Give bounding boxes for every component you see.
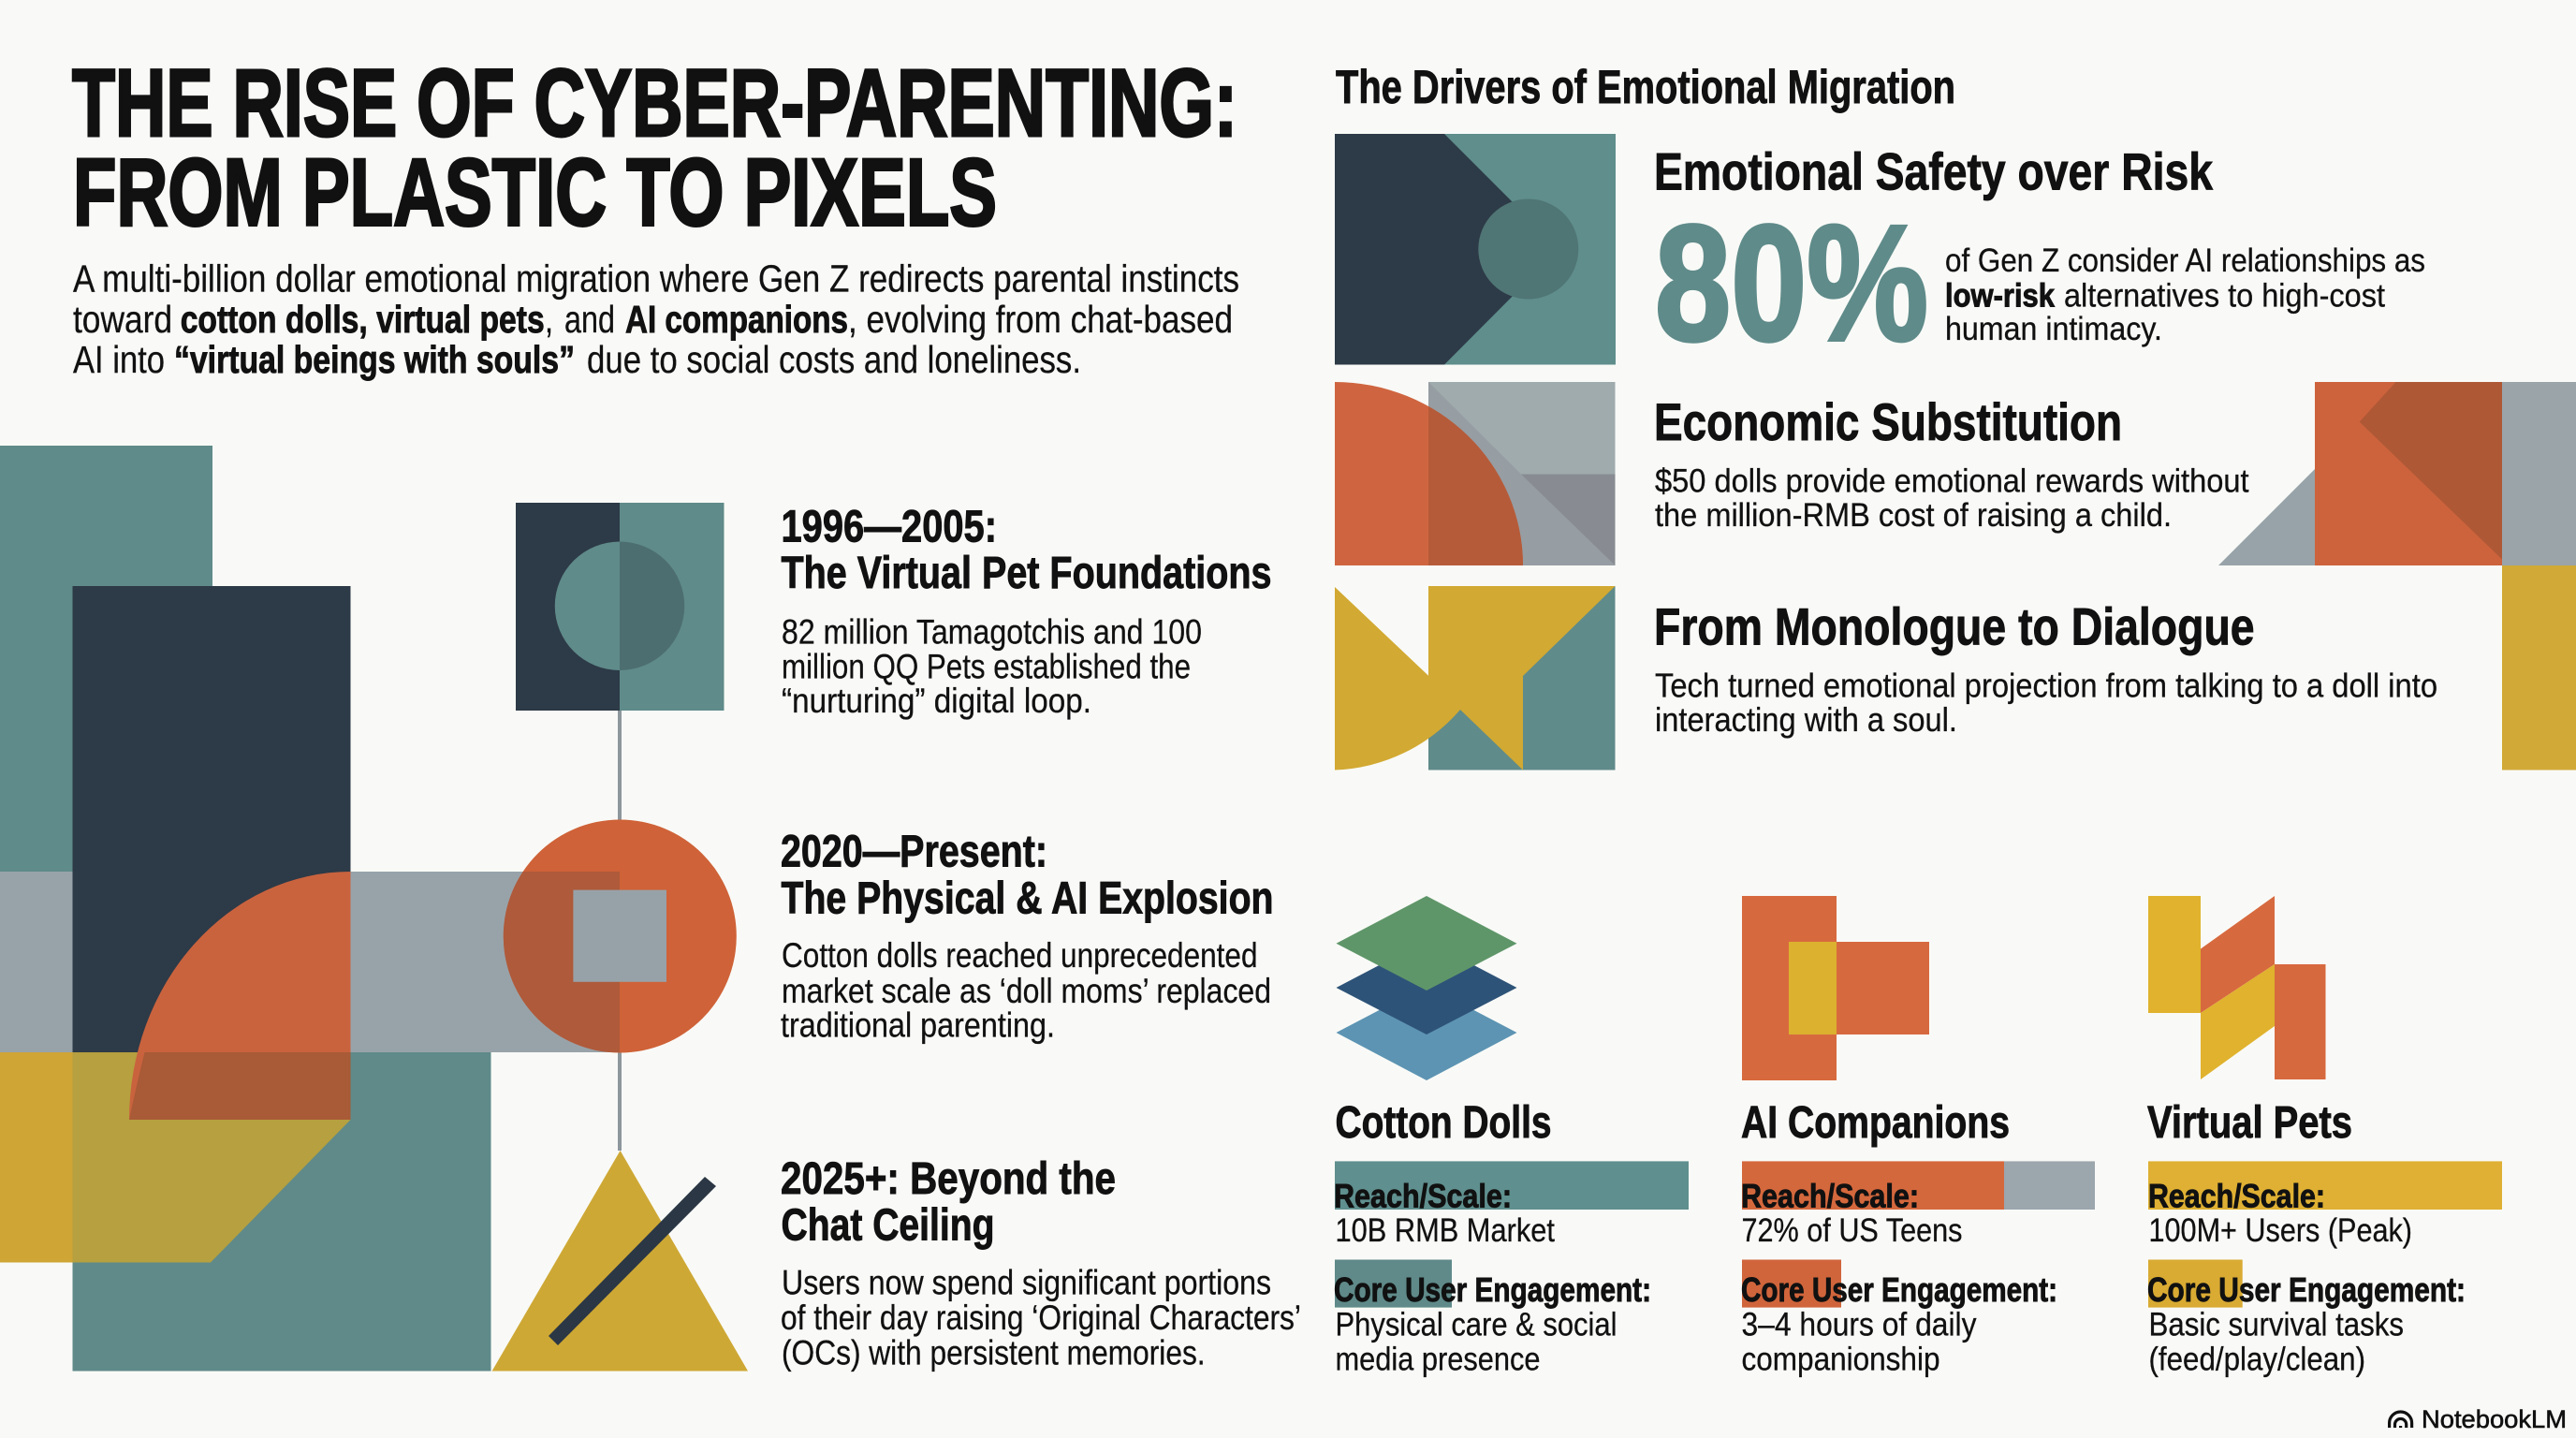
icon: stacked diamonds (1337, 896, 1516, 1080)
timeline entry: 2020-present: traditional parenting. (781, 1005, 1055, 1044)
timeline entry: 1996-2005: 82 million Tamagotchis and 100 (782, 613, 1202, 652)
subtitle paragraph: AI into (73, 338, 165, 381)
driver: from monologue to dialogue: Tech turned emotional projection from talking to a doll into (1655, 666, 2437, 704)
bar: ai companions engagement (1742, 1260, 1841, 1308)
stats: ai companions: Core User Engagement: (1741, 1270, 2057, 1309)
driver: economic substitution: the million-RMB cost of raising a child. (1655, 497, 2172, 534)
timeline entry: 2020-present: market scale as ‘doll moms’ replaced (782, 972, 1271, 1010)
icon: monologue to dialogue (1335, 586, 1616, 770)
bar: cotton dolls engagement (1335, 1260, 1452, 1308)
panel: drivers of emotional migration (1335, 134, 2437, 770)
subtitle paragraph: , evolving from chat-based (848, 298, 1233, 341)
panel: timeline (492, 502, 1301, 1372)
stats: cotton dolls (1334, 1178, 1651, 1377)
timeline entry: 1996-2005 (781, 502, 1271, 720)
icon: overlapping rectangles (1742, 896, 1929, 1080)
subtitle paragraph: , (545, 298, 553, 341)
driver: emotional safety over risk (1654, 142, 2425, 375)
timeline entry: 2025+: (OCs) with persistent memories. (782, 1333, 1206, 1372)
timeline entry: 2020-present: 2020—Present: (781, 828, 1047, 877)
title: THE RISE OF CYBER-PARENTING: (72, 50, 1237, 156)
title (72, 50, 1237, 246)
panel: virtual pets (2147, 896, 2502, 1377)
timeline connector line (618, 711, 622, 1151)
driver: emotional safety over risk: alternatives to high-cost (2064, 277, 2385, 315)
stats: ai companions (1741, 1178, 2057, 1377)
icon: 2020-present circle and square (503, 820, 737, 1052)
subtitle paragraph: AI companions (625, 298, 848, 341)
stats: ai companions: 72% of US Teens (1741, 1212, 1962, 1249)
stats: cotton dolls: media presence (1335, 1341, 1541, 1377)
decorative shapes: right edge (2218, 382, 2576, 770)
timeline entry: 2020-present (781, 828, 1273, 1044)
timeline entry: 2025+: 2025+: Beyond the (781, 1154, 1116, 1204)
stats: virtual pets (2147, 1178, 2466, 1377)
stats: ai companions: 3–4 hours of daily (1741, 1307, 1977, 1343)
timeline entry: 2025+: Chat Ceiling (781, 1200, 994, 1250)
bar: virtual pets reach (2148, 1161, 2502, 1210)
stats: cotton dolls: Reach/Scale: (1334, 1178, 1512, 1215)
timeline entry: 1996-2005: million QQ Pets established the (782, 648, 1191, 686)
driver: from monologue to dialogue: From Monologue to Dialogue (1654, 596, 2255, 655)
driver: emotional safety over risk: Emotional Safety over Risk (1654, 142, 2214, 201)
driver: emotional safety over risk: low-risk (1945, 277, 2055, 315)
subtitle paragraph: “virtual beings with souls” (174, 338, 575, 381)
driver: from monologue to dialogue (1654, 596, 2437, 739)
stats: ai companions: companionship (1741, 1341, 1939, 1377)
timeline entry: 2025+: Users now spend significant portions (782, 1264, 1271, 1302)
driver: economic substitution: Economic Substitution (1654, 392, 2122, 451)
bar: virtual pets engagement (2148, 1260, 2243, 1308)
stats: cotton dolls: Core User Engagement: (1334, 1270, 1651, 1309)
icon: economic substitution (1335, 382, 1616, 565)
timeline entry: 2020-present: The Physical & AI Explosion (781, 873, 1273, 923)
subtitle paragraph: A multi-billion dollar emotional migration where Gen Z redirects parental instincts (73, 257, 1239, 301)
timeline entry: 1996-2005: 1996—2005: (781, 502, 997, 552)
subtitle paragraph: and (564, 298, 615, 341)
subtitle paragraph (73, 257, 1239, 381)
driver: emotional safety over risk: of Gen Z consider AI relationships as (1945, 242, 2425, 279)
title: FROM PLASTIC TO PIXELS (73, 139, 997, 246)
stat: 80%: 80% (1655, 192, 1928, 375)
stats: virtual pets: (feed/play/clean) (2149, 1341, 2365, 1377)
stats: virtual pets: Reach/Scale: (2148, 1178, 2325, 1215)
stats: ai companions: Reach/Scale: (1741, 1178, 1919, 1215)
subtitle paragraph: cotton dolls, virtual pets (181, 298, 545, 341)
bar: cotton dolls reach (1335, 1161, 1689, 1210)
logo: NotebookLM: NotebookLM (2422, 1405, 2567, 1433)
bar: ai companions reach (1742, 1161, 2095, 1210)
timeline entry: 2025+ (781, 1154, 1301, 1372)
stats: cotton dolls: 10B RMB Market (1335, 1212, 1555, 1249)
card heading: ai companions: AI Companions (1741, 1098, 2010, 1148)
driver: emotional safety over risk: human intimacy. (1945, 311, 2162, 347)
icon: 1996-2005 square and circle (516, 503, 724, 711)
stats: virtual pets: Core User Engagement: (2147, 1270, 2466, 1309)
driver: economic substitution: $50 dolls provide emotional rewards without (1655, 462, 2249, 499)
timeline entry: 1996-2005: “nurturing” digital loop. (782, 682, 1091, 720)
card heading: cotton dolls: Cotton Dolls (1335, 1098, 1552, 1148)
driver: economic substitution (1654, 392, 2249, 534)
heading: drivers: The Drivers of Emotional Migration (1336, 61, 1955, 113)
stats: cotton dolls: Physical care & social (1335, 1307, 1617, 1343)
icon: 2025+ triangle with bar (492, 1151, 748, 1371)
icon: emotional safety (1335, 134, 1616, 365)
panel: cotton dolls (1334, 896, 1689, 1377)
card heading: virtual pets: Virtual Pets (2147, 1098, 2352, 1148)
stats: virtual pets: 100M+ Users (Peak) (2149, 1212, 2412, 1249)
subtitle paragraph: due to social costs and loneliness. (587, 338, 1081, 381)
driver: from monologue to dialogue: interacting with a soul. (1655, 700, 1957, 739)
icon: angular blocks (2148, 896, 2325, 1079)
geometric collage artwork (0, 446, 620, 1371)
panel: ai companions (1741, 896, 2095, 1377)
timeline entry: 1996-2005: The Virtual Pet Foundations (781, 549, 1271, 598)
stats: virtual pets: Basic survival tasks (2149, 1307, 2404, 1343)
timeline entry: 2025+: of their day raising ‘Original Characters’ (781, 1299, 1301, 1337)
subtitle paragraph: toward (73, 298, 172, 341)
timeline entry: 2020-present: Cotton dolls reached unprecedented (782, 936, 1258, 975)
